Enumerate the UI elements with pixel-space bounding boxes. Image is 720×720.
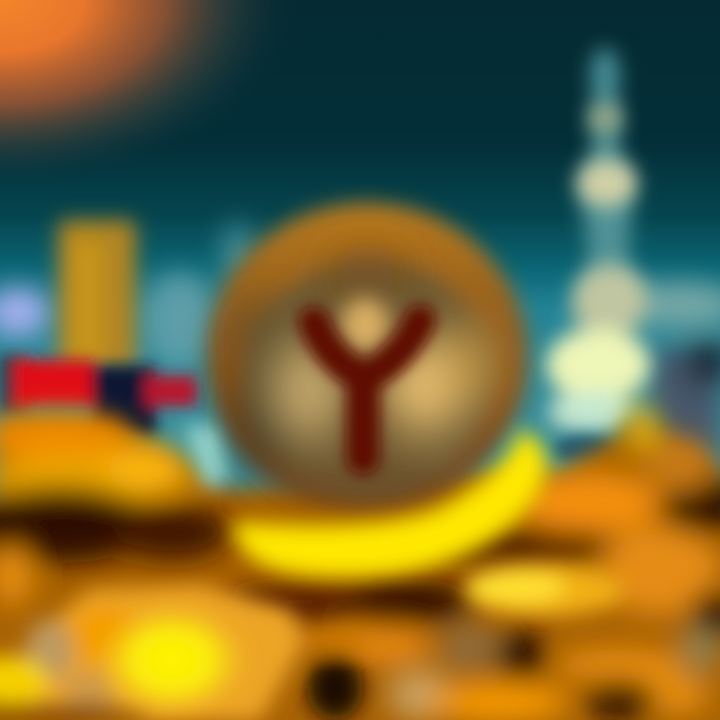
gold coins: foreground	[0, 564, 625, 720]
flags: red and navy	[0, 355, 197, 438]
gold coins: bright hotspot	[92, 600, 252, 720]
coin: Y symbol	[314, 320, 420, 458]
teal gap beside coin	[185, 425, 228, 490]
coin: face shading and highlights	[238, 258, 498, 494]
yellow crescent: coin cradle	[232, 430, 547, 577]
hazy city skyline	[0, 223, 720, 460]
orange glow: top left	[0, 0, 300, 190]
gold pile: base layer	[0, 404, 720, 720]
coin: outer gold ring	[207, 203, 527, 509]
tower: right	[546, 48, 650, 464]
building: left gold tower	[58, 220, 136, 370]
